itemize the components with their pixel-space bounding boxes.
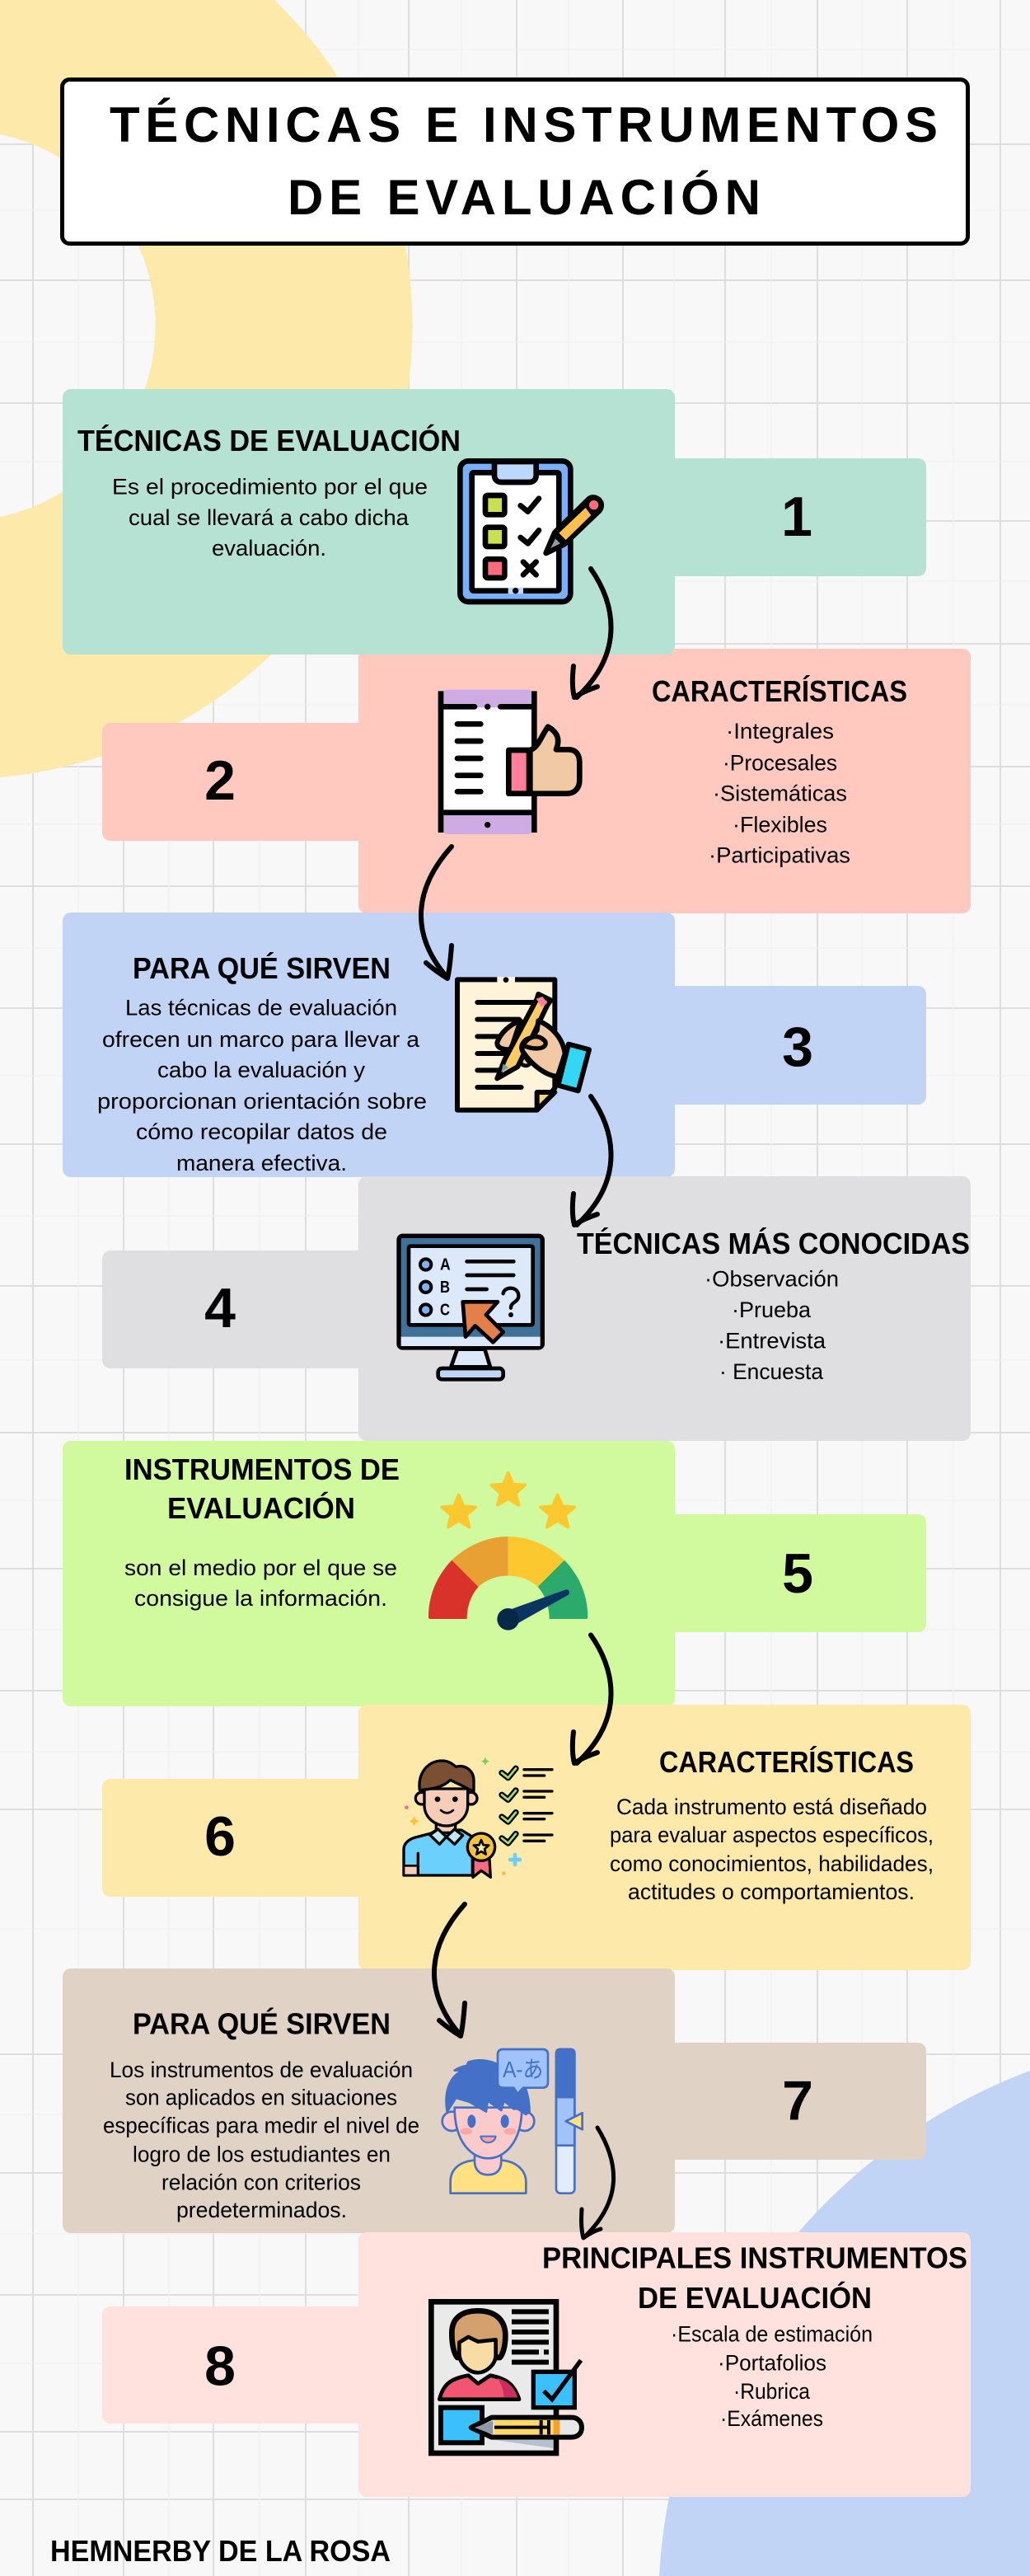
title [63, 79, 967, 244]
number 7: 7 [782, 2069, 813, 2132]
panel 6: características de los instrumentos [102, 1705, 971, 1970]
heading: instrumentos de evaluación: INSTRUMENTOS DE [124, 1452, 400, 1486]
heading: instrumentos de evaluación [124, 1452, 400, 1525]
arrow: 6 to 7 [434, 1904, 465, 2036]
text: características de los instrumentos: para evaluar aspectos específicos, [610, 1823, 934, 1847]
decorative blue circle [659, 2071, 1030, 2576]
heading: para qué sirven: PARA QUÉ SIRVEN [133, 951, 391, 985]
panel 8: principales instrumentos [102, 2232, 971, 2497]
text: para qué sirven [97, 996, 427, 1175]
panel 2: características [102, 649, 971, 913]
text: uso de los instrumentos: son aplicados en situaciones [125, 2086, 397, 2110]
list: instrumentos: ·Exámenes [720, 2406, 823, 2431]
text: características de los instrumentos: actitudes o comportamientos. [628, 1879, 915, 1904]
icon: computer with test: C [440, 1301, 450, 1320]
list: técnicas: ·Prueba [732, 1297, 811, 1322]
list: técnicas: ·Entrevista [718, 1329, 826, 1354]
list: técnicas: ·Observación [705, 1266, 839, 1291]
text: características de los instrumentos: Cada instrumento está diseñado [616, 1795, 927, 1819]
heading: características: CARACTERÍSTICAS [659, 1745, 914, 1779]
panel 4: técnicas más conocidas [102, 1176, 971, 1441]
text: uso de los instrumentos: Los instrumentos de evaluación [110, 2058, 413, 2082]
list: características [709, 719, 850, 867]
list: técnicas: · Encuesta [719, 1359, 823, 1384]
list: características: ·Sistemáticas [713, 781, 847, 806]
decorative yellow ring [0, 0, 413, 777]
icon: computer with test [399, 1236, 542, 1379]
text: definición: evaluación. [212, 536, 326, 561]
list: instrumentos: ·Portafolios [718, 2351, 826, 2376]
title: DE EVALUACIÓN [288, 170, 761, 225]
arrow: 5 to 6 [573, 1635, 611, 1763]
icon: computer with test: B [440, 1278, 450, 1297]
text: definición: Es el procedimiento por el que [112, 475, 428, 500]
number 8: 8 [204, 2334, 236, 2397]
text: definición de instrumentos [124, 1555, 397, 1611]
text: definición de instrumentos: consigue la información. [134, 1586, 387, 1611]
number 1: 1 [781, 486, 812, 548]
list: características: ·Integrales [726, 719, 834, 744]
arrow: 1 to 2 [573, 569, 611, 697]
icon: clipboard checklist [460, 461, 602, 602]
panel 7: para qué sirven los instrumentos [63, 1968, 926, 2233]
text: definición [112, 475, 428, 561]
text: para qué sirven: proporcionan orientación sobre [97, 1089, 427, 1114]
icon: hand writing on document [457, 977, 589, 1110]
text: uso de los instrumentos: específicas para medir el nivel de [103, 2114, 419, 2138]
text: para qué sirven: Las técnicas de evaluación [125, 996, 397, 1021]
panel 5: instrumentos de evaluación [63, 1441, 926, 1706]
number 3: 3 [782, 1016, 813, 1078]
number 5: 5 [782, 1542, 813, 1605]
icon: boy with language level bar [442, 2049, 583, 2194]
heading: principales instrumentos de evaluación [542, 2241, 967, 2315]
text: uso de los instrumentos: relación con criterios [162, 2170, 361, 2194]
heading: técnicas de evaluación: TÉCNICAS DE EVALUACIÓN [77, 423, 461, 457]
panel 1: técnicas de evaluación [63, 389, 926, 655]
text: definición de instrumentos: son el medio por el que se [124, 1555, 397, 1580]
heading: para qué sirven: PARA QUÉ SIRVEN [133, 2006, 391, 2041]
list: características: ·Procesales [723, 750, 837, 775]
text: uso de los instrumentos: predeterminados. [176, 2198, 347, 2222]
title: TÉCNICAS E INSTRUMENTOS [110, 97, 938, 152]
text: para qué sirven: ofrecen un marco para llevar a [102, 1027, 419, 1052]
icon: student profile sheet with pencil [431, 2302, 582, 2453]
number 6: 6 [204, 1805, 236, 1868]
heading: instrumentos de evaluación: EVALUACIÓN [167, 1490, 355, 1525]
number 4: 4 [204, 1277, 236, 1340]
author: HEMNERBY DE LA ROSA [50, 2534, 391, 2568]
text: para qué sirven: cabo la evaluación y [157, 1058, 366, 1082]
text: para qué sirven: cómo recopilar datos de [136, 1119, 387, 1144]
icon: student with badge and checklist [404, 1757, 552, 1877]
list: instrumentos [671, 2321, 873, 2431]
text: características de los instrumentos [610, 1795, 934, 1904]
arrow: 2 to 3 [421, 847, 452, 978]
list: instrumentos: ·Rubrica [733, 2379, 810, 2404]
arrow: 3 to 4 [573, 1096, 611, 1225]
heading: características: CARACTERÍSTICAS [652, 674, 907, 708]
number 2: 2 [204, 749, 236, 812]
heading: técnicas más conocidas: TÉCNICAS MÁS CONOCIDAS [577, 1227, 970, 1260]
list: técnicas [705, 1266, 839, 1384]
heading: principales instrumentos de evaluación: PRINCIPALES INSTRUMENTOS [542, 2241, 967, 2275]
text: para qué sirven: manera efectiva. [176, 1151, 347, 1175]
arrow: 7 to 8 [582, 2128, 614, 2238]
text: definición: cual se llevará a cabo dicha [129, 505, 409, 530]
icon: computer with test: A [440, 1255, 451, 1274]
list: instrumentos: ·Escala de estimación [671, 2321, 873, 2346]
icon: boy with language level bar: A-あ [503, 2057, 543, 2082]
list: características: ·Participativas [709, 842, 850, 867]
text: uso de los instrumentos: logro de los estudiantes en [133, 2142, 391, 2166]
list: características: ·Flexibles [733, 813, 827, 838]
panel 3: para qué sirven [63, 913, 926, 1177]
text: características de los instrumentos: como conocimientos, habilidades, [610, 1851, 934, 1876]
icon: gauge with stars [428, 1473, 588, 1631]
heading: principales instrumentos de evaluación: DE EVALUACIÓN [638, 2280, 872, 2315]
text: uso de los instrumentos [103, 2058, 419, 2222]
icon: phone with thumbs up [441, 690, 579, 834]
